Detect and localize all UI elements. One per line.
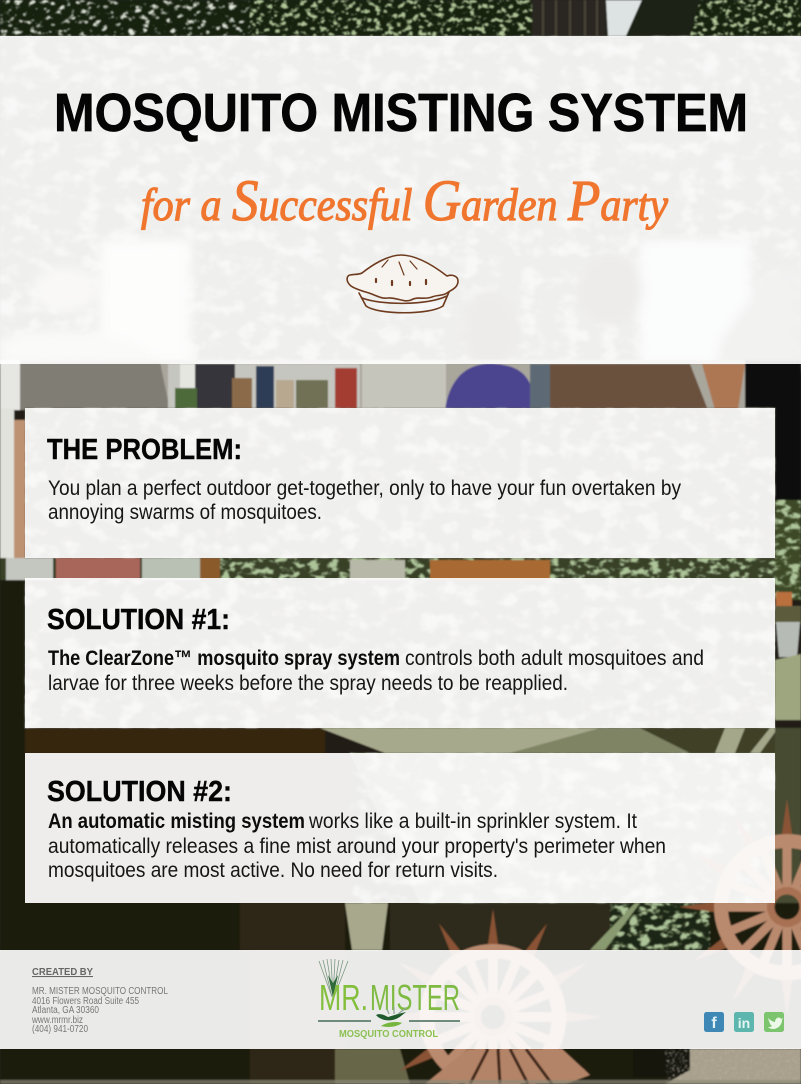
table cloth gap <box>25 728 325 753</box>
icon: twitter <box>764 1012 784 1032</box>
created by credits: MR. MISTER MOSQUITO CONTROL <box>32 986 168 997</box>
lower ground <box>0 903 801 1084</box>
left edge figure <box>0 408 14 558</box>
created by credits: (404) 941-0720 <box>32 1024 88 1035</box>
panel: the problem <box>25 408 775 558</box>
title: MOSQUITO MISTING SYSTEM <box>54 83 748 143</box>
solution 1 text <box>48 647 704 695</box>
rusty wheels <box>385 909 601 1084</box>
created by credits: CREATED BY <box>32 966 93 978</box>
panel: footer <box>0 950 801 1049</box>
left edge dark drape <box>0 580 25 950</box>
created by credits: Atlanta, GA 30360 <box>32 1005 99 1016</box>
tree canopy <box>0 0 801 36</box>
logo: Mr. Mister Mosquito Control: MISTER <box>370 977 460 1018</box>
right edge plants and pots <box>775 500 801 600</box>
icon: linkedin: in <box>738 1015 750 1031</box>
logo: Mr. Mister Mosquito Control: MOSQUITO CONTROL <box>339 1028 439 1040</box>
people row <box>0 360 801 410</box>
solution 2 text: mosquitoes are most active. No need for return visits. <box>48 859 498 882</box>
icon: facebook <box>704 1012 724 1032</box>
solution 2 text <box>48 810 666 882</box>
created by credits <box>31 966 168 1035</box>
subtitle: for a Successful Garden Party <box>141 168 669 233</box>
solution 1 text: controls both adult mosquitoes and <box>405 647 704 670</box>
heading: solution 2: SOLUTION #2: <box>47 776 232 808</box>
solution 1 text: The ClearZone™ mosquito spray system <box>48 647 400 670</box>
problem text <box>48 477 681 524</box>
icon: pie <box>347 255 458 313</box>
market table with plants, mostly hidden behind panels <box>25 408 775 558</box>
icon: facebook: f <box>711 1015 717 1032</box>
panel: title banner <box>0 36 801 364</box>
heading: the problem: THE PROBLEM: <box>47 434 242 466</box>
created by credits: www.mrmr.biz <box>31 1015 83 1026</box>
heading: solution 1: SOLUTION #1: <box>47 604 230 636</box>
foliage behind title banner <box>0 36 801 364</box>
panel: solution 2 <box>25 753 775 903</box>
solution 2 text: An automatic misting system <box>48 810 305 833</box>
created by credits: 4016 Flowers Road Suite 455 <box>32 996 139 1007</box>
logo: Mr. Mister Mosquito Control: MR. <box>319 977 368 1018</box>
problem text: annoying swarms of mosquitoes. <box>48 501 322 524</box>
solution 2 text: automatically releases a fine mist around your property's perimeter when <box>48 835 666 858</box>
problem text: You plan a perfect outdoor get-together, only to have your fun overtaken by <box>48 477 681 500</box>
solution 1 text: larvae for three weeks before the spray needs to be reapplied. <box>48 672 568 695</box>
panel: solution 1 <box>25 578 775 728</box>
icon: linkedin <box>734 1012 754 1032</box>
logo: Mr. Mister Mosquito Control <box>318 959 460 1040</box>
solution 2 text: works like a built-in sprinkler system. It <box>308 810 637 833</box>
